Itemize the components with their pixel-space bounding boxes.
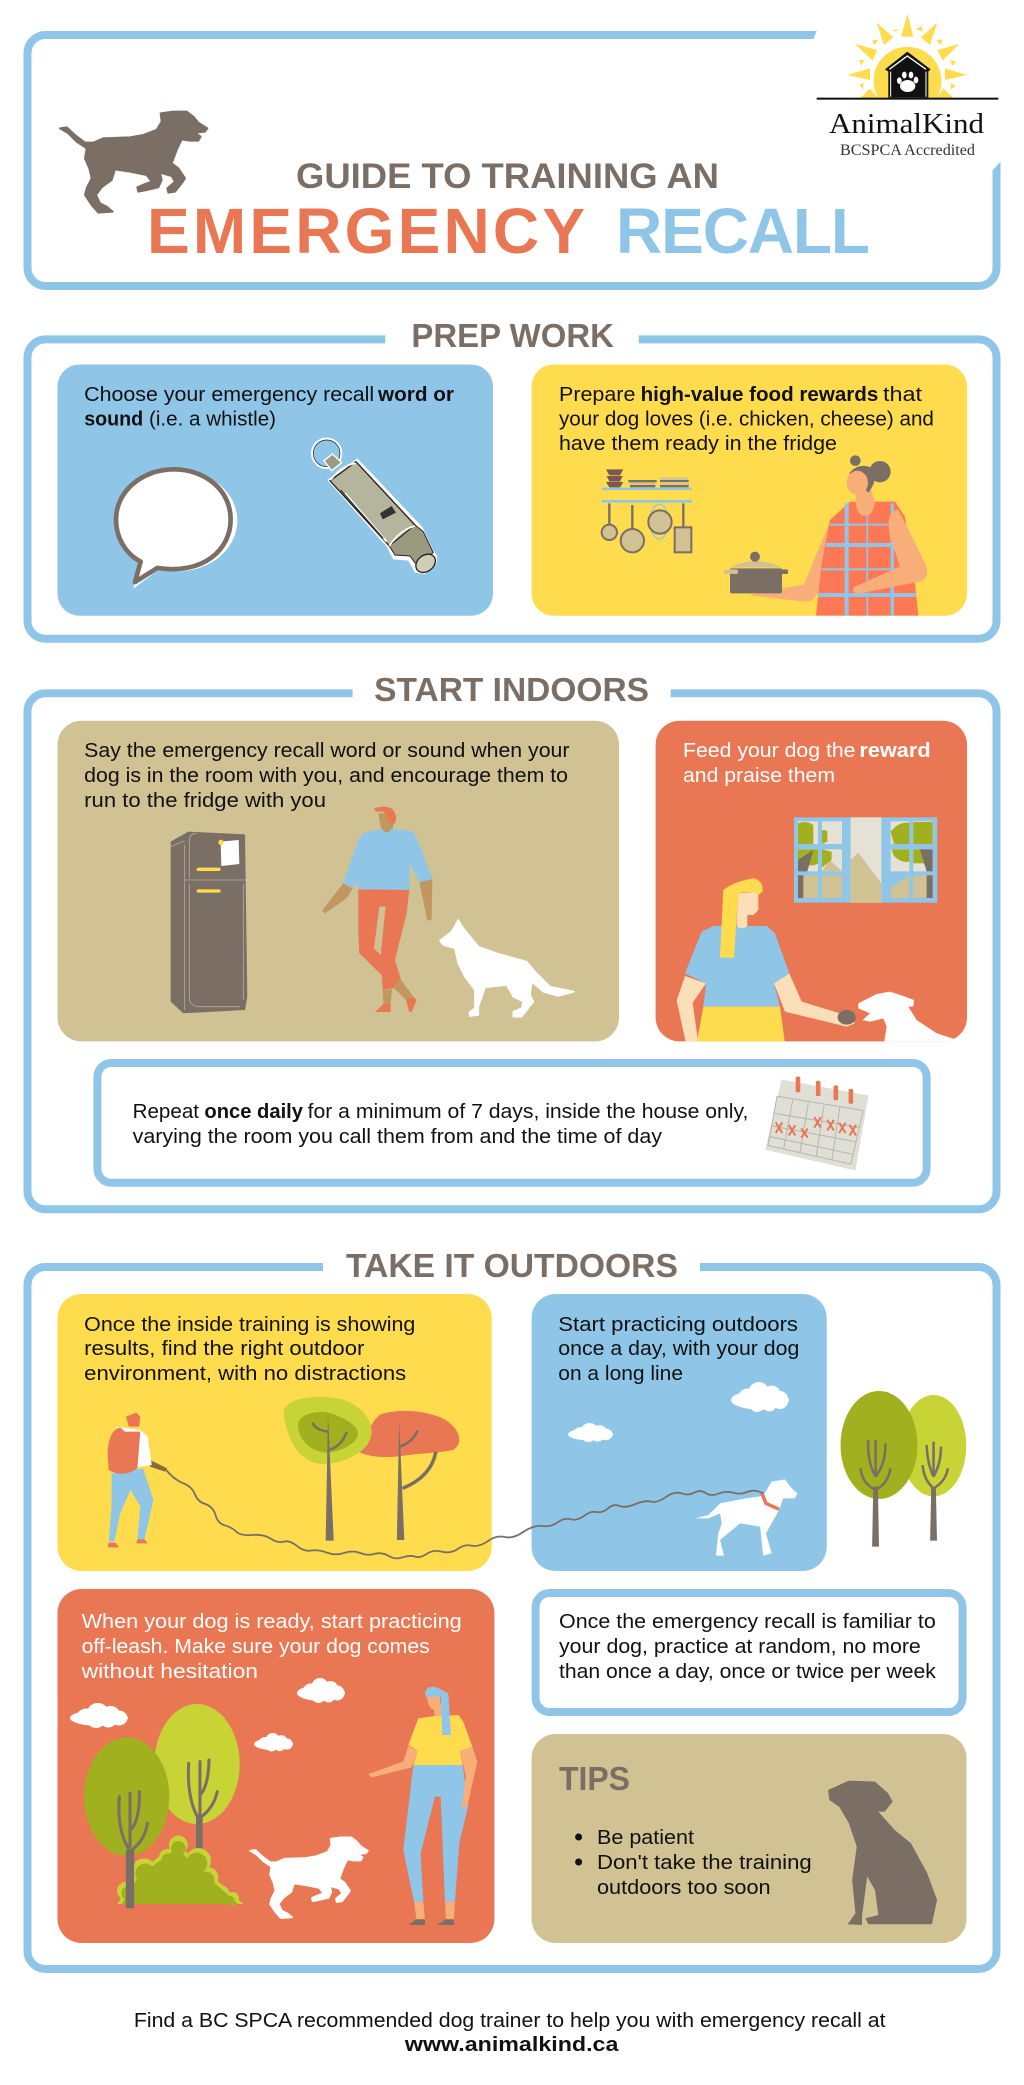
icon: speech bubble (116, 469, 237, 589)
heading: take it outdoors: TAKE IT OUTDOORS (346, 1247, 678, 1284)
panel: prep work (28, 317, 996, 639)
card: feed reward: and praise them (683, 765, 835, 787)
icon: person with backpack (108, 1413, 167, 1547)
icon: two trees (841, 1391, 966, 1547)
heading: start indoors: START INDOORS (374, 671, 649, 708)
icon: woman feeding dog (677, 878, 970, 1043)
card: start practicing off-leash (58, 1589, 494, 1943)
card: feed reward: Feed your dog the (683, 740, 856, 762)
icon: white running dog (250, 1837, 368, 1918)
panel: start indoors (28, 671, 996, 1209)
icon: small cloud (568, 1423, 613, 1442)
icon: window (794, 817, 937, 903)
icon: cloud (731, 1382, 789, 1412)
callout: practice at random (536, 1593, 962, 1712)
logo: AnimalKind (817, 14, 998, 159)
card: say the recall word: Say the emergency recall word or sound when your (84, 740, 570, 762)
card: feed reward: reward (859, 740, 931, 762)
icon: kitchen shelf and pans (602, 469, 692, 552)
header panel (28, 14, 1024, 286)
icon: fridge (171, 832, 247, 1013)
icon: sitting dog (828, 1781, 937, 1925)
icon: running dog (60, 112, 207, 213)
icon: trees and bush (84, 1704, 243, 1908)
card: start practicing off-leash: off-leash. Make sure your dog comes (82, 1636, 430, 1658)
footer: Find a BC SPCA recommended dog trainer to help you with emergency recall at (134, 2010, 886, 2032)
callout: repeat once daily: Repeat (133, 1101, 199, 1123)
heading: tips: TIPS (559, 1760, 630, 1797)
callout: repeat once daily (97, 1063, 927, 1183)
card: prepare food rewards: Prepare (559, 384, 635, 406)
icon: long leash (166, 1470, 763, 1558)
callout: practice at random: your dog, practice at random, no more (559, 1636, 921, 1658)
card: start practicing outdoors: on a long line (558, 1363, 683, 1385)
footer: www.animalkind.ca (404, 2034, 619, 2056)
icon: clouds (70, 1678, 345, 1752)
icon: calendar (765, 1078, 868, 1171)
icon: orange and green trees (284, 1397, 459, 1541)
card: prepare food rewards: that (883, 384, 923, 406)
card: find the right environment (58, 1294, 492, 1571)
tips list: outdoors too soon (597, 1877, 771, 1899)
callout: repeat once daily: varying the room you call them from and the time of day (133, 1126, 662, 1148)
icon: whistle (312, 439, 439, 576)
card: start practicing outdoors: once a day, with your dog (558, 1338, 799, 1360)
card: start practicing outdoors (532, 1294, 827, 1571)
card: choose word or sound (58, 364, 493, 616)
card: prepare food rewards: your dog loves (i.e. chicken, cheese) and (559, 408, 934, 430)
logo: AnimalKind: AnimalKind (829, 108, 985, 140)
card: tips (532, 1734, 966, 1943)
footer (134, 2010, 886, 2056)
card: start practicing off-leash: without hesitation (80, 1661, 258, 1683)
card: say the recall word: run to the fridge with you (84, 790, 326, 812)
card: choose word or sound: (i.e. a whistle) (149, 408, 276, 430)
callout: repeat once daily: once daily (204, 1101, 304, 1123)
icon: white shepherd dog (440, 920, 574, 1017)
card: start practicing outdoors: Start practicing outdoors (558, 1314, 798, 1336)
card: choose word or sound: sound (84, 408, 143, 430)
icon: man (322, 807, 432, 1012)
tips list: Be patient (597, 1827, 694, 1849)
card: choose word or sound: Choose your emergency recall (84, 384, 374, 406)
card: say the recall word: dog is in the room with you, and encourage them to (84, 765, 568, 787)
callout: practice at random: Once the emergency recall is familiar to (559, 1611, 936, 1633)
card: start practicing off-leash: When your dog is ready, start practicing (82, 1611, 462, 1633)
icon: woman standing (368, 1687, 477, 1925)
card: prepare food rewards: have them ready in the fridge (559, 433, 837, 455)
card: feed reward (656, 721, 970, 1043)
card: find the right environment: environment, with no distractions (84, 1363, 406, 1385)
title: EMERGENCY (147, 195, 585, 267)
card: choose word or sound: word or (377, 384, 454, 406)
card: prepare food rewards: high-value food rewards (641, 384, 878, 406)
heading: prep work: PREP WORK (411, 317, 614, 354)
icon: white dog with collar (695, 1479, 798, 1556)
title: RECALL (616, 195, 870, 267)
tips list (575, 1827, 812, 1899)
callout: practice at random: than once a day, once or twice per week (559, 1661, 937, 1683)
icon: woman with pot (724, 455, 927, 616)
card: find the right environment: results, find the right outdoor (84, 1338, 365, 1360)
card: find the right environment: Once the inside training is showing (84, 1314, 415, 1336)
logo: AnimalKind: BCSPCA Accredited (840, 142, 975, 159)
panel: take it outdoors (28, 1247, 996, 1969)
card: say the recall word (58, 721, 619, 1041)
callout: repeat once daily: for a minimum of 7 days, inside the house only, (308, 1101, 748, 1123)
tips list: Don't take the training (597, 1852, 812, 1874)
title: GUIDE TO TRAINING AN (296, 157, 719, 196)
card: prepare food rewards (532, 364, 967, 616)
title (147, 157, 870, 267)
